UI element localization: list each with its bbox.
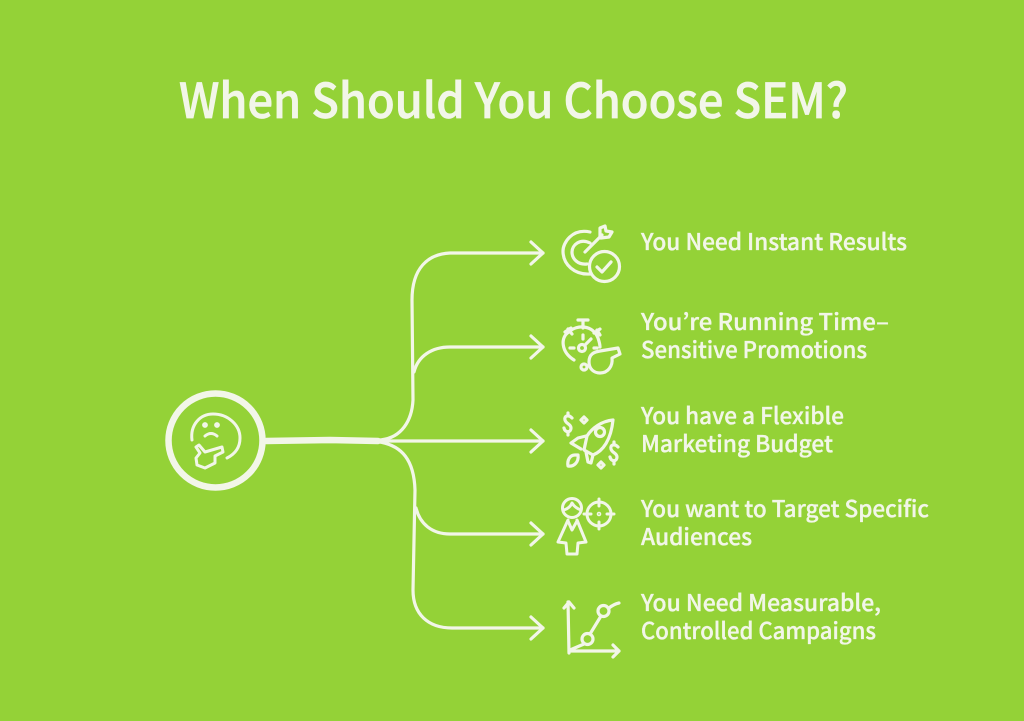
text: target specific audiences: Audiences [641, 518, 752, 552]
title: When Should You Choose SEM? [179, 62, 848, 132]
text: instant results: You Need Instant Results [640, 223, 907, 257]
connector: branch to instant results [380, 242, 543, 440]
icon: person and crosshair [558, 498, 614, 554]
icon: thinking face [192, 414, 240, 468]
icon: stopwatch and whistle [563, 320, 620, 373]
text: time-sensitive promotions: Sensitive Promotions [641, 331, 867, 365]
text: measurable controlled campaigns [640, 584, 881, 646]
text: measurable controlled campaigns: Controlled Campaigns [641, 612, 876, 646]
central thinking node [168, 394, 262, 488]
icon: target with check [563, 226, 620, 282]
text: target specific audiences [640, 490, 929, 552]
icon: growth chart [564, 602, 619, 657]
text: flexible marketing budget [640, 397, 844, 459]
node ring [168, 394, 262, 488]
icon: rocket with dollars [564, 413, 618, 468]
connector: branch to measurable campaigns [380, 442, 543, 639]
connector: branch to time-sensitive promotions [414, 336, 543, 372]
text: flexible marketing budget: Marketing Budget [641, 425, 833, 459]
connector: branch to flexible budget [380, 430, 543, 452]
text: target specific audiences: You want to Target Specific [640, 490, 929, 524]
connector: stem from node [266, 440, 378, 441]
text: time-sensitive promotions: You’re Running Time– [640, 303, 889, 337]
text: time-sensitive promotions [640, 303, 889, 365]
text: flexible marketing budget: You have a Flexible [640, 397, 844, 431]
connector: branch to target audiences [416, 508, 543, 545]
text: measurable controlled campaigns: You Need Measurable, [640, 584, 881, 618]
